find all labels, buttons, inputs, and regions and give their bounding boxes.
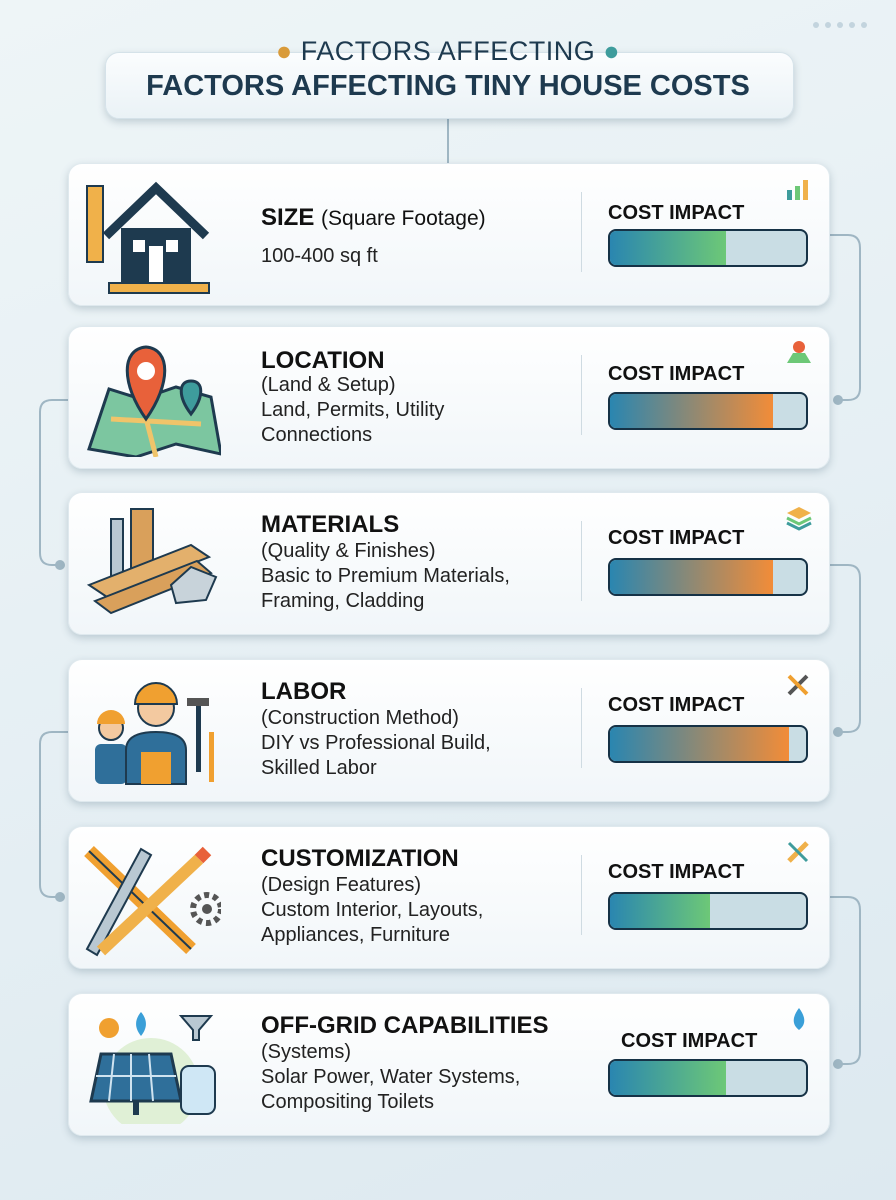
icon: workers: [95, 682, 214, 785]
title: FACTORS AFFECTING TINY HOUSE COSTS: [146, 70, 750, 102]
panel: labor: [68, 659, 830, 802]
panel: customization: CUSTOMIZATION: [261, 845, 459, 872]
panel: off-grid: (Systems): [261, 1041, 351, 1063]
panel: materials: COST IMPACT: [608, 527, 744, 549]
icon: lumber: [87, 508, 218, 614]
title: subtitle: ● FACTORS AFFECTING ●: [276, 36, 620, 66]
panel: size: 100-400 sq ft: [261, 245, 378, 267]
panel: location: [68, 326, 830, 469]
icon: house: [86, 182, 210, 294]
panel: size: [68, 163, 830, 306]
icon: pencil: [787, 841, 809, 863]
icon: chart: [787, 180, 808, 200]
icon: design tools: [84, 846, 221, 956]
panel: labor: LABOR: [261, 678, 346, 705]
icon: tools: [788, 674, 808, 696]
panel: labor: (Construction Method): [261, 707, 459, 729]
panel: materials: Basic to Premium Materials,: [261, 565, 510, 587]
panel: materials: MATERIALS: [261, 511, 399, 538]
title box: [105, 52, 794, 119]
panel: labor: Skilled Labor: [261, 757, 377, 779]
icon: map: [87, 346, 221, 457]
icon: solar & water: [89, 1012, 216, 1124]
panel: location: (Land & Setup): [261, 374, 396, 396]
panel: customization: (Design Features): [261, 874, 421, 896]
bar: labor: [608, 725, 808, 763]
panel: off-grid: COST IMPACT: [621, 1030, 757, 1052]
icon: drop: [794, 1008, 804, 1030]
panel: off-grid: Compositing Toilets: [261, 1091, 434, 1113]
panel: location: Land, Permits, Utility: [261, 399, 444, 421]
bar: location: [608, 392, 808, 430]
panel: customization: Custom Interior, Layouts,: [261, 899, 483, 921]
panel: location: COST IMPACT: [608, 363, 744, 385]
icon: layers: [786, 507, 812, 531]
bar: off-grid: [608, 1059, 808, 1097]
panel: customization: Appliances, Furniture: [261, 924, 450, 946]
panel: off-grid: OFF-GRID CAPABILITIES: [261, 1012, 549, 1039]
bar: materials: [608, 558, 808, 596]
panel: size: SIZE (Square Footage): [261, 204, 486, 231]
panel: materials: (Quality & Finishes): [261, 540, 436, 562]
panel: location: LOCATION: [261, 347, 385, 374]
bar: size: [608, 229, 808, 267]
panel: off-grid: Solar Power, Water Systems,: [261, 1066, 520, 1088]
panel: materials: Framing, Cladding: [261, 590, 424, 612]
panel: size: COST IMPACT: [608, 202, 744, 224]
icon: pin: [787, 341, 811, 363]
panel: customization: COST IMPACT: [608, 861, 744, 883]
panel: labor: DIY vs Professional Build,: [261, 732, 491, 754]
panel: location: Connections: [261, 424, 372, 446]
panel: off-grid: [68, 993, 830, 1136]
panel: materials: [68, 492, 830, 635]
panel: customization: [68, 826, 830, 969]
panel: labor: COST IMPACT: [608, 694, 744, 716]
bar: customization: [608, 892, 808, 930]
